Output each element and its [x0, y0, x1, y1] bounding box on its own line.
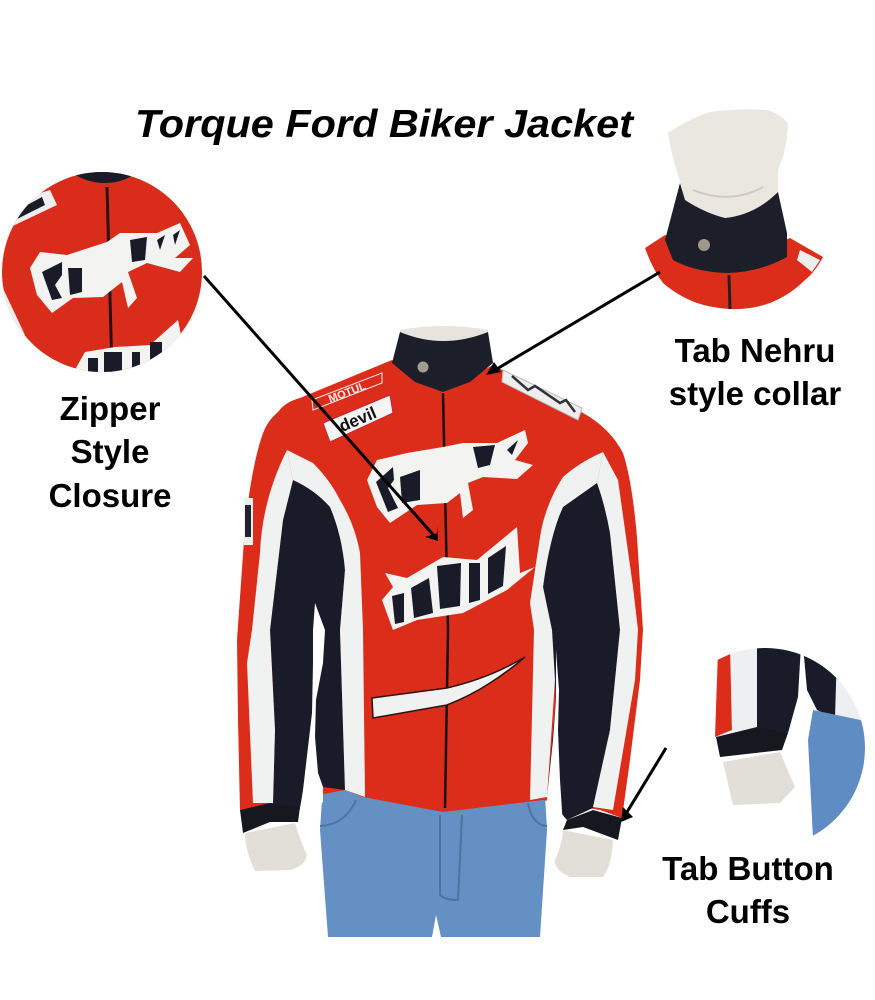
right cuff	[563, 810, 622, 840]
left cuff	[240, 803, 300, 833]
black sleeve	[757, 645, 801, 733]
white stripe left sleeve	[247, 450, 293, 803]
right shoulder patch	[502, 370, 582, 420]
arrow: zipper closure	[204, 276, 438, 541]
white swoosh	[372, 657, 525, 718]
collar edge	[76, 172, 132, 183]
white stripe right body	[530, 452, 603, 800]
collar button	[698, 239, 710, 251]
gap between left sleeve and body	[298, 603, 325, 822]
torso black panel	[804, 656, 838, 715]
carpe lettering	[367, 430, 533, 523]
jeans	[320, 785, 547, 937]
white stripe left body	[287, 450, 365, 797]
devil patch crop	[14, 190, 57, 226]
cuff band	[716, 727, 788, 757]
jeans	[808, 710, 865, 836]
mom lettering	[72, 320, 182, 375]
neck	[400, 326, 488, 345]
mannequin hands	[245, 823, 613, 877]
sleeve patch	[244, 498, 253, 545]
devil patch	[323, 395, 393, 442]
label: zipper style closure: Style	[71, 433, 149, 470]
collar button	[418, 362, 428, 372]
black collar	[665, 183, 787, 273]
white stripe right sleeve	[593, 452, 638, 810]
label: tab nehru style collar: Tab Nehru	[675, 332, 835, 369]
neck	[668, 109, 788, 222]
zipper	[729, 275, 730, 309]
shoulder patch	[797, 250, 820, 272]
black right panel and sleeve	[543, 483, 620, 820]
detail image: collar	[645, 109, 823, 309]
mom lettering	[382, 527, 535, 630]
jacket product photo	[237, 326, 643, 937]
white sleeve stripe	[730, 645, 757, 732]
detail circle: cuff	[715, 648, 865, 836]
white stripe crop	[4, 290, 25, 335]
label: tab button cuffs	[662, 850, 834, 930]
label: zipper style closure: Closure	[49, 477, 171, 514]
motul patch	[312, 373, 382, 410]
label: tab nehru style collar	[669, 332, 841, 412]
zipper	[107, 187, 112, 372]
black left panel and sleeve	[270, 480, 345, 817]
title: Torque Ford Biker Jacket	[135, 103, 635, 146]
black collar	[392, 332, 493, 392]
label: zipper style closure: Zipper	[60, 390, 161, 427]
devil patch: devil	[336, 403, 379, 436]
motul patch: MOTUL	[327, 380, 368, 406]
carpe lettering	[30, 223, 193, 313]
arrow: collar	[486, 272, 660, 375]
mannequin hand	[723, 752, 795, 805]
detail circle: zipper closure	[0, 170, 204, 376]
red jacket body and sleeves	[237, 360, 643, 818]
torso white stripe	[835, 678, 861, 720]
gap between right sleeve and body	[547, 650, 563, 826]
red sleeve strip	[715, 650, 732, 737]
label: tab button cuffs: Tab Button	[662, 850, 834, 887]
red shoulder	[645, 235, 823, 309]
zipper	[443, 393, 448, 808]
label: tab nehru style collar: style collar	[669, 375, 841, 412]
label: zipper style closure	[49, 390, 171, 514]
arrow: cuffs	[621, 748, 666, 822]
label: tab button cuffs: Cuffs	[706, 893, 790, 930]
